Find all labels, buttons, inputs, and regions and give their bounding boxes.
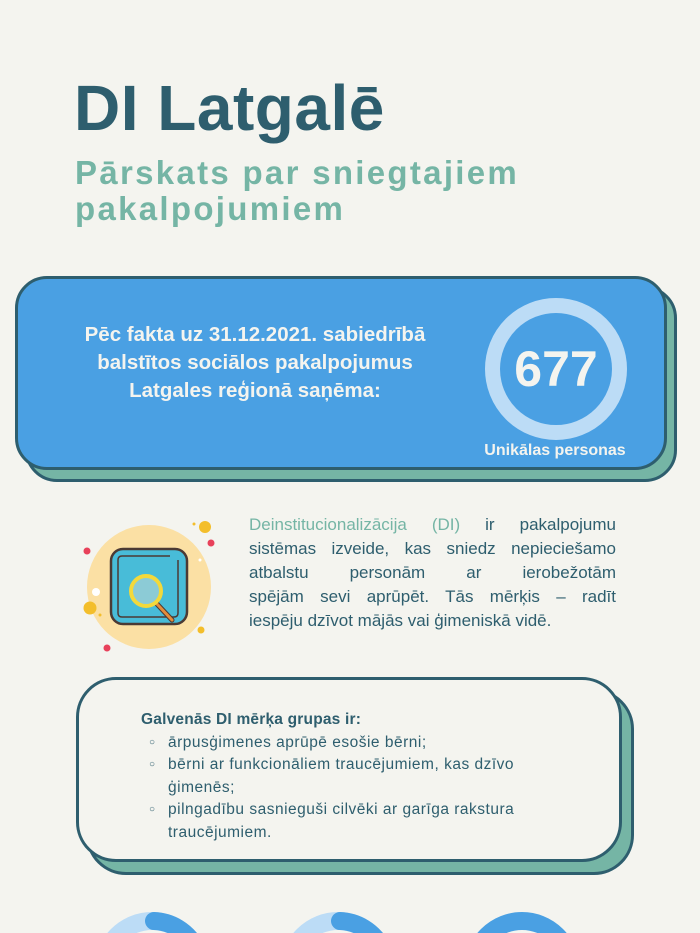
- summary text: [85, 323, 426, 402]
- target groups list: ģimenēs;: [168, 778, 235, 796]
- DI definition text: spējām sevi aprūpēt. Tās mērķis – radīt: [249, 587, 616, 606]
- subtitle: [75, 154, 519, 227]
- subtitle: pakalpojumiem: [75, 190, 345, 227]
- DI definition text: atbalstu personām ar ierobežotām: [249, 563, 616, 582]
- summary text: balstītos sociālos pakalpojumus: [97, 351, 413, 374]
- target groups list: Galvenās DI mērķa grupas ir:: [141, 711, 361, 728]
- target groups list: pilngadību sasnieguši cilvēki ar garīga rakstura: [168, 801, 514, 818]
- ring charts (partial): [108, 912, 567, 933]
- target groups list: ārpusģimenes aprūpē esošie bērni;: [168, 734, 427, 750]
- target groups list: bērni ar funkcionāliem traucējumiem, kas dzīvo: [168, 756, 514, 773]
- panel: summary: [15, 276, 677, 482]
- DI definition text: Deinstitucionalizācija (DI) ir pakalpojumu: [249, 515, 616, 534]
- DI definition text: [249, 515, 616, 630]
- target groups list: [141, 711, 514, 840]
- ring: 677: [485, 298, 627, 440]
- panel: target groups: [76, 677, 634, 875]
- target groups list: ○: [149, 759, 156, 770]
- subtitle: Pārskats par sniegtajiem: [75, 154, 519, 191]
- DI definition text: sistēmas izveide, kas sniedz nepieciešamo: [249, 539, 616, 558]
- DI definition text: iespēju dzīvot mājās vai ģimeniskā vidē.: [249, 611, 551, 630]
- target groups list: traucējumiem.: [168, 824, 272, 840]
- target groups list: ○: [149, 736, 156, 748]
- target groups list: ○: [149, 804, 156, 815]
- summary text: Pēc fakta uz 31.12.2021. sabiedrībā: [85, 323, 425, 346]
- ring: 677: 677: [514, 341, 598, 397]
- ring caption: Unikālas personas: [484, 442, 626, 459]
- title: DI Latgalē: [74, 72, 385, 144]
- icon: magnifier: [84, 521, 214, 652]
- summary text: Latgales reģionā saņēma:: [129, 379, 381, 402]
